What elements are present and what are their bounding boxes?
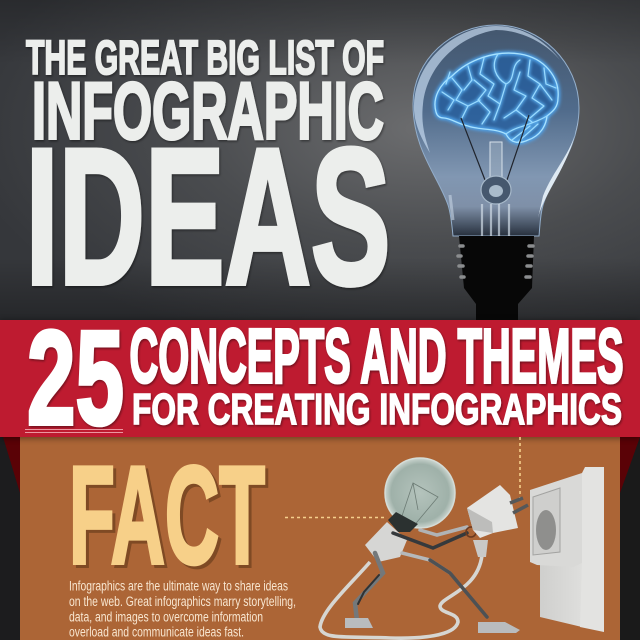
heading: fact: FACT xyxy=(69,438,265,593)
heading: fact xyxy=(69,438,268,596)
side strip xyxy=(580,467,604,632)
icon: light bulb with glowing brain xyxy=(413,25,579,320)
fact text block: data, and images to overcome information xyxy=(69,610,263,624)
cable xyxy=(320,555,482,638)
double underline xyxy=(25,430,123,432)
side panels xyxy=(0,437,640,640)
heading: fact: FACT xyxy=(72,441,268,596)
plug pins xyxy=(510,498,528,513)
bulb screw base xyxy=(459,236,534,320)
dotted connector lines xyxy=(285,437,520,518)
icon: wall socket xyxy=(530,467,604,632)
front cover xyxy=(530,473,582,567)
robot feet xyxy=(345,618,520,633)
title: INFOGRAPHIC xyxy=(32,66,384,156)
fact text block: overload and communicate ideas fast. xyxy=(69,624,244,640)
lower back plate xyxy=(540,560,603,632)
bulb head xyxy=(385,458,455,528)
socket hole xyxy=(536,510,556,550)
title xyxy=(26,32,390,326)
robot arms and legs xyxy=(355,527,487,621)
bulb glass xyxy=(413,25,579,236)
panel: fact background xyxy=(20,437,620,640)
fact text block: on the web. Great infographics marry storytelling, xyxy=(69,594,296,609)
icon: robot light bulb pushing plug xyxy=(320,458,528,638)
header background xyxy=(0,0,640,322)
fact text block: Infographics are the ultimate way to share ideas xyxy=(69,578,288,594)
red banner xyxy=(0,320,640,439)
fact text block xyxy=(69,578,296,640)
collar body xyxy=(365,522,407,562)
banner heading xyxy=(130,314,624,434)
brain xyxy=(435,53,558,142)
banner number 25: 25 xyxy=(27,304,124,453)
plug xyxy=(467,485,518,538)
filament xyxy=(461,115,529,180)
socket inset xyxy=(533,488,560,555)
title: THE GREAT BIG LIST OF xyxy=(26,32,384,85)
title: IDEAS xyxy=(26,108,390,326)
